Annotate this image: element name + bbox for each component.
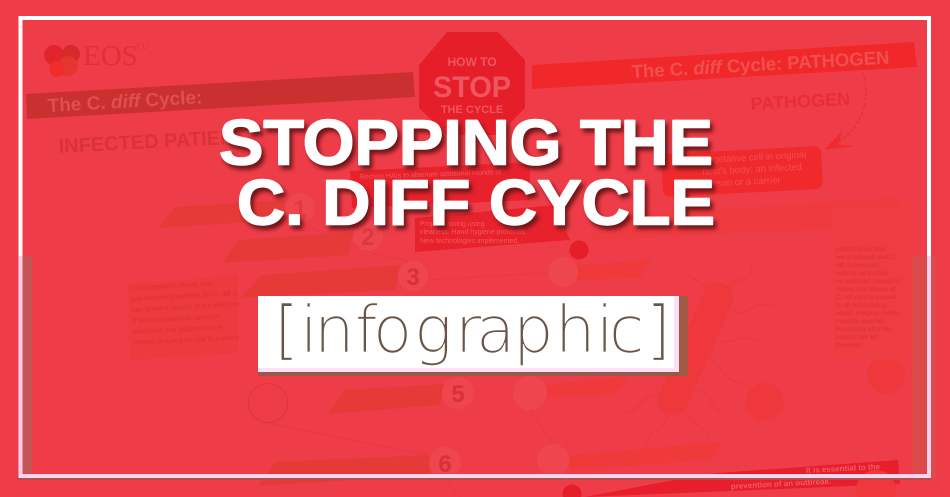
spore circle: bottom [856, 470, 896, 497]
text block: right: diff spores can [836, 262, 879, 269]
logo: EOS CU: EOS [83, 41, 138, 72]
spore circle: center [746, 383, 784, 421]
stage marker: upper [548, 257, 652, 287]
panel: center red notes: New technologies implemented. [420, 238, 519, 245]
icon: bacterium [623, 265, 772, 444]
step 6 [258, 447, 461, 486]
panel: center red notes: Proper training using [420, 221, 485, 228]
text block: right: the room. [836, 342, 864, 349]
panel: center red notes: cleaness. Hand hygiene protocols. [420, 229, 527, 236]
stage marker: middle [513, 376, 630, 410]
text block: right: performance that [836, 246, 885, 253]
text block: right: areas. Hospital rooms [836, 310, 900, 317]
spore circle: right [867, 356, 905, 394]
left banner: The C. diff Cycle: The C. diff Cycle: [47, 87, 203, 117]
text block: left [128, 275, 243, 360]
text block: right [833, 205, 913, 360]
text block: right: patient has left [836, 334, 878, 341]
red dot: lower [562, 484, 582, 497]
bar: upper right [590, 197, 902, 240]
title line 2: C. DIFF CYCLE [237, 166, 715, 238]
red dot: upper [570, 240, 588, 260]
stop sign [419, 32, 525, 135]
text block: right: must be cleaned [836, 318, 884, 325]
text block: left: If an asymptomatic carrier is [132, 313, 221, 325]
infographic label: [infographic] [274, 294, 671, 368]
callout: vegetative cell: person or a carrier [703, 175, 781, 190]
text block: right: shows that spores of [836, 286, 896, 293]
stage marker: lower [537, 442, 722, 476]
callout: vegetative cell [661, 146, 823, 197]
heading: infected patient: INFECTED PATIENT [58, 126, 247, 158]
text block: left: Local research shows that [131, 281, 212, 292]
text block: right: thoroughly after the [836, 326, 892, 333]
panel: center red notes: Reduce HAIs to alternate additional rounds of [360, 169, 501, 181]
title [219, 106, 715, 238]
callout: vegetative cell: host's body: an infected [702, 162, 802, 178]
right banner: pathogen cycle [532, 42, 917, 89]
step 1 [158, 193, 315, 228]
connector lines [268, 223, 600, 497]
step 3 [240, 261, 428, 298]
panel: center red notes [350, 162, 570, 252]
dashed arrow [826, 73, 866, 149]
callout: vegetative cell: Vegetative cell in original [702, 150, 807, 166]
step 5: 5 [451, 381, 465, 408]
callout: bottom right: It is essential to the [806, 462, 881, 475]
text block: right: to all surrounding [836, 302, 886, 309]
callout: bottom right: prevention of an outbreak. [731, 477, 831, 491]
title line 1: STOPPING THE [219, 106, 713, 178]
right banner: pathogen cycle: The C. diff Cycle: PATHOGEN [631, 47, 890, 82]
frame shadow: lower sections [17, 256, 936, 480]
patient circle [248, 384, 288, 422]
heading: pathogen: PATHOGEN [750, 89, 850, 114]
text block: right: on surfaces. Research [836, 278, 901, 285]
stop sign: HOW TO [447, 55, 497, 69]
text block: right: survive up to days [836, 270, 889, 277]
text block: left: pre-screening patients for C. diff in [131, 290, 239, 303]
step 3: 3 [406, 264, 420, 291]
text block: right: were cleaned, that C. [835, 254, 898, 261]
step 5 [328, 377, 474, 414]
text block: left: can prevent spread of the infection. [132, 301, 242, 314]
logo: EOS CU: CU [137, 42, 148, 51]
step 6: 6 [438, 451, 452, 478]
stop sign: STOP [433, 71, 511, 104]
callout: bottom right [585, 460, 900, 497]
stop sign: THE CYCLE [441, 104, 503, 116]
text block: left: moved to wait a bundle to prevent [134, 334, 239, 347]
step 1: 1 [293, 196, 307, 223]
left banner: The C. diff Cycle [26, 72, 415, 119]
text block: left: identified, that patient can be [133, 324, 223, 336]
logo: EOS CU [44, 41, 148, 77]
step 2 [222, 221, 383, 263]
text block: right: C. diff can be moved [836, 294, 896, 301]
step 2: 2 [361, 224, 375, 251]
